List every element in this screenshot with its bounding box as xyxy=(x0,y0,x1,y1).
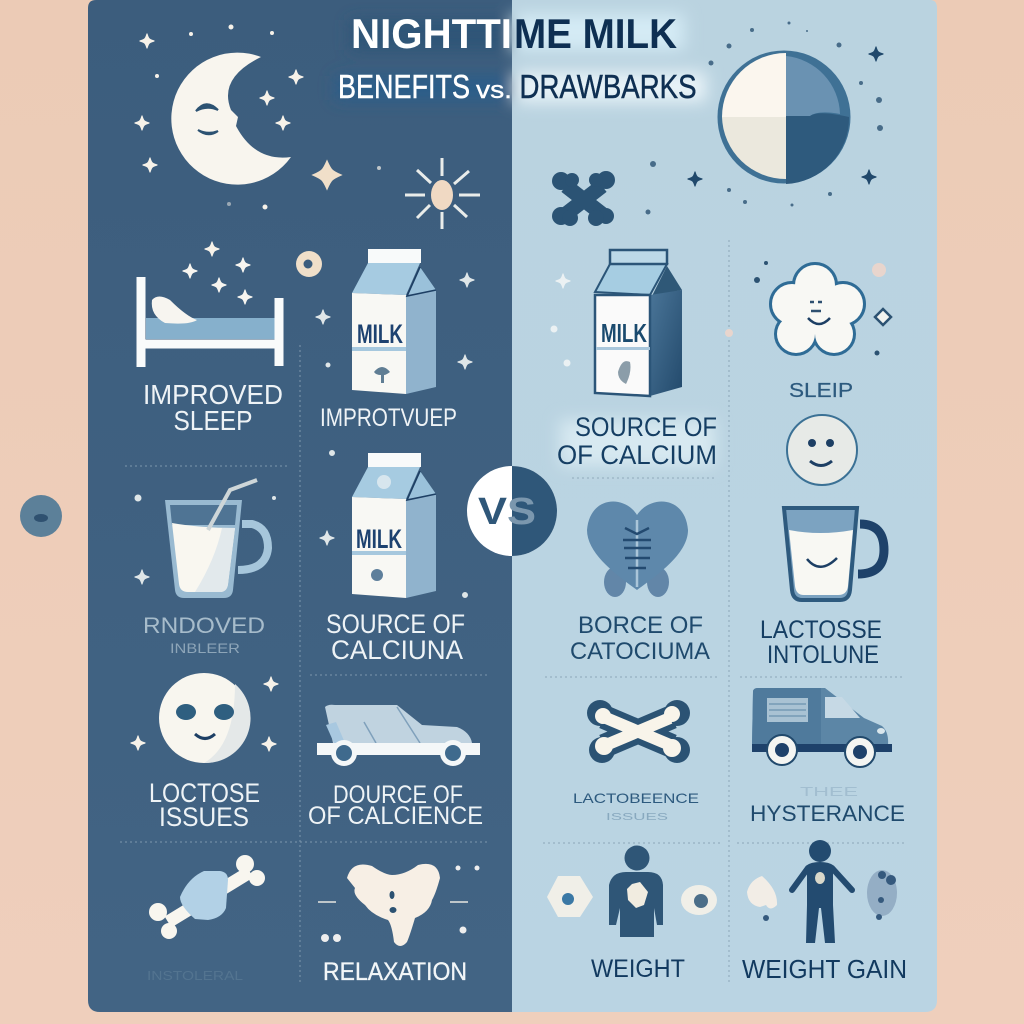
panel: drawbacks side xyxy=(512,0,937,1012)
label: weight gain: WEIGHT GAIN xyxy=(742,954,907,984)
label: borce of catociuma xyxy=(570,612,710,665)
stars: above bed xyxy=(183,258,252,304)
icons: side dots left xyxy=(547,876,717,917)
label: hysterance: HYSTERANCE xyxy=(750,801,905,826)
icon: bone right xyxy=(587,700,690,763)
stars: right top xyxy=(688,47,883,186)
icon: crossed bones xyxy=(552,171,615,226)
label glow: calcium xyxy=(560,420,715,466)
label: dource of calcience xyxy=(308,781,483,830)
subtitle: DRAWBARKS xyxy=(520,68,696,105)
subtitle xyxy=(338,68,696,105)
badge: VS xyxy=(467,466,557,556)
label: lactobeence xyxy=(573,790,699,823)
title xyxy=(351,10,677,57)
icon: round face xyxy=(787,415,857,485)
label: sleip: SLEIP xyxy=(789,380,853,402)
star: left of carton 3 xyxy=(551,274,570,366)
label: dource of calcience: OF CALCIENCE xyxy=(308,802,483,830)
label: improved sleep: IMPROVED xyxy=(143,379,283,410)
label: source of calcium: SOURCE OF xyxy=(575,412,717,442)
title: NIGHTTI xyxy=(351,10,512,57)
icon: outside blue dot xyxy=(20,495,62,537)
label: weight: WEIGHT xyxy=(591,955,685,983)
icon: glass with straw xyxy=(165,480,268,598)
label: borce of catociuma: CATOCIUMA xyxy=(570,638,710,665)
icon: car xyxy=(317,705,480,766)
title: ME MILK xyxy=(514,10,677,57)
label: andoved xyxy=(143,613,265,656)
icon: moon xyxy=(171,53,291,185)
label: loctose issues: LOCTOSE xyxy=(149,778,260,808)
icon: heart ribs xyxy=(587,501,688,597)
stars: smiley xyxy=(131,677,278,751)
specks: around flower xyxy=(725,261,891,356)
icon: relaxation shape xyxy=(318,864,480,946)
label: lactobeence: LACTOBEENCE xyxy=(573,790,699,806)
subtitle: vs. xyxy=(476,77,512,104)
panel: benefits side xyxy=(88,0,512,1012)
icon: half moon right xyxy=(718,50,850,184)
icon: person left xyxy=(609,846,663,937)
stars: moon side xyxy=(135,25,380,256)
label: source of calciuma: SOURCE OF xyxy=(326,609,465,639)
label: lactobeence: ISSUES xyxy=(606,812,669,823)
star: large peach xyxy=(314,162,340,188)
label: improtvuep: IMPROTVUEP xyxy=(320,404,457,432)
subtitle: BENEFITS xyxy=(338,68,470,105)
icon: milk carton 2: MILK xyxy=(356,524,402,554)
icon: milk carton 3: MILK xyxy=(601,318,647,348)
label: lactosse intolune xyxy=(760,616,882,669)
label: hysterance xyxy=(750,784,905,826)
icon: sun sparkle xyxy=(405,158,480,229)
icons: side blobs right xyxy=(747,870,897,921)
label: source of calcium xyxy=(557,412,717,470)
label: relaxation: RELAXATION xyxy=(323,958,467,986)
icon: flower face xyxy=(772,265,863,353)
label: loctose issues xyxy=(149,778,260,832)
icon: smiley face left xyxy=(159,673,251,763)
label: andoved: INBLEER xyxy=(170,640,240,656)
label: hysterance: THEE xyxy=(800,784,859,799)
title glow xyxy=(335,14,706,102)
label: dource of calcience: DOURCE OF xyxy=(333,781,463,809)
label: source of calcium: OF CALCIUM xyxy=(557,440,717,470)
icon: person right xyxy=(792,840,852,943)
label: borce of catociuma: BORCE OF xyxy=(578,612,703,639)
label: lactosse intolune: LACTOSSE xyxy=(760,616,882,644)
icon: milk carton 1 xyxy=(352,249,436,394)
badge: VS: VS xyxy=(478,491,536,533)
icon: van xyxy=(752,688,892,767)
label: lactosse intolune: INTOLUNE xyxy=(767,641,879,669)
specks: around half moon xyxy=(646,22,883,214)
faint ghost label: INSTOLERAL xyxy=(147,968,243,983)
label: source of calciuma xyxy=(326,609,465,665)
label: andoved: RNDOVED xyxy=(143,613,265,638)
icon: milk carton 2 xyxy=(352,453,436,598)
stars: column two xyxy=(135,273,474,598)
label: improved sleep xyxy=(143,379,283,436)
icon: meat on bone xyxy=(149,855,265,939)
label: improved sleep: SLEEP xyxy=(174,405,252,436)
icon: milk carton 3 xyxy=(595,250,682,396)
label: source of calciuma: CALCIUNA xyxy=(331,635,463,665)
icon: mug with smile xyxy=(784,508,884,600)
icon: flower dot xyxy=(296,251,322,277)
icon: milk carton 1: MILK xyxy=(357,319,403,349)
icon: bed xyxy=(141,277,279,367)
label: loctose issues: ISSUES xyxy=(159,802,249,832)
